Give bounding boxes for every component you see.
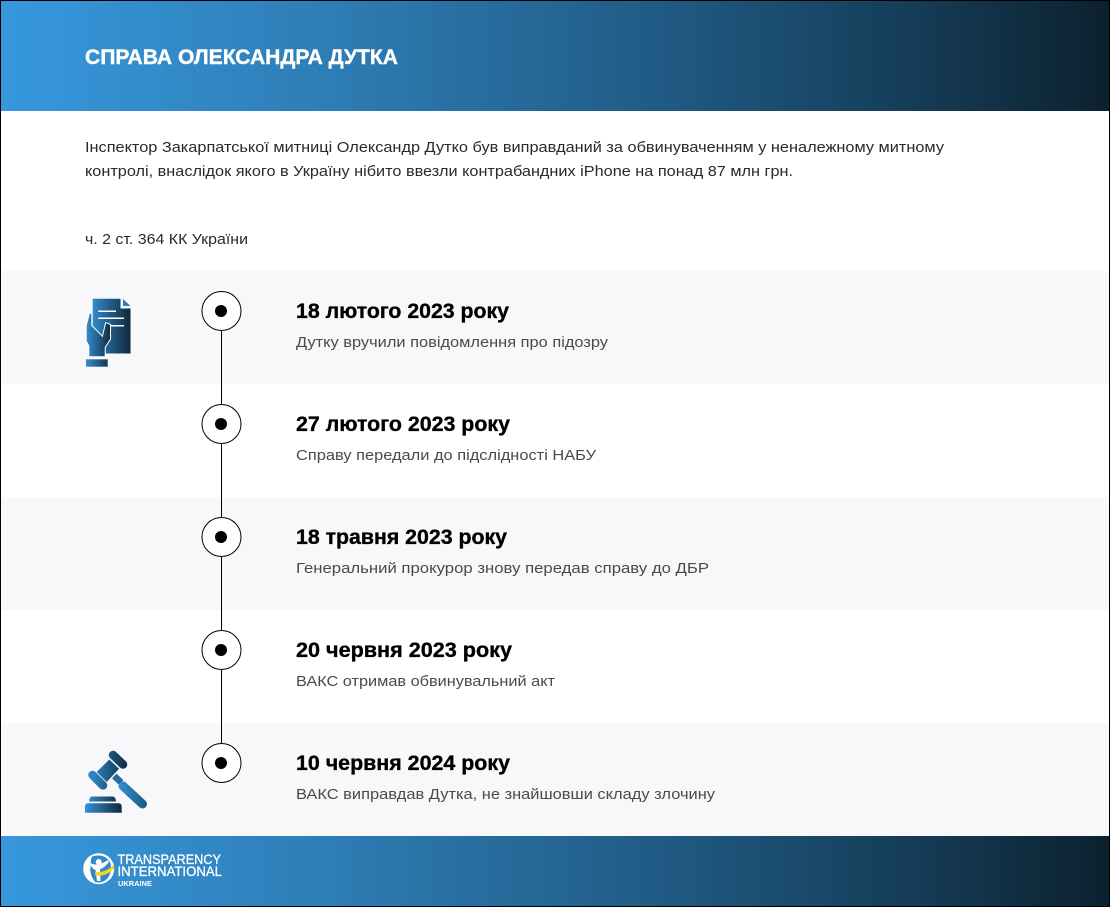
icon: judge gavel	[85, 755, 142, 813]
timeline event 5	[202, 744, 716, 803]
description 2: Справу передали до підслідності НАБУ	[296, 447, 596, 464]
date 2: 27 лютого 2023 року	[296, 413, 510, 436]
marker 1	[202, 292, 241, 330]
timeline event 3	[202, 518, 709, 577]
logo wordmark: TRANSPARENCY	[118, 852, 221, 867]
icon: hand holding document	[86, 299, 130, 367]
timeline event 1	[202, 292, 609, 351]
description 4: ВАКС отримав обвинувальний акт	[296, 673, 555, 690]
intro paragraph: контролі, внаслідок якого в Україну нібито ввезли контрабандних iPhone на понад 87 млн грн.	[85, 163, 793, 180]
marker 2	[202, 404, 241, 444]
title: СПРАВА ОЛЕКСАНДРА ДУТКА	[85, 46, 398, 69]
header band	[1, 1, 1109, 111]
footer band	[1, 836, 1109, 906]
timeline connector line	[220, 325, 222, 750]
intro paragraph: Інспектор Закарпатської митниці Олександр Дутко був виправданий за обвинуваченням у неналежному митному	[85, 139, 945, 156]
logo: Transparency International Ukraine	[83, 852, 222, 888]
date 1: 18 лютого 2023 року	[296, 300, 509, 323]
description 5: ВАКС виправдав Дутка, не знайшовши складу злочину	[296, 786, 716, 803]
date 3: 18 травня 2023 року	[296, 526, 507, 549]
logo: Transparency International Ukraine: INTERNATIONAL	[118, 864, 222, 879]
legal article reference: ч. 2 ст. 364 КК України	[85, 231, 248, 248]
date 4: 20 червня 2023 року	[296, 639, 512, 662]
timeline row backgrounds	[1, 271, 1109, 836]
marker 5	[202, 744, 241, 782]
description 3: Генеральний прокурор знову передав справу до ДБР	[296, 560, 709, 577]
marker 3	[202, 518, 241, 556]
description 1: Дутку вручили повідомлення про підозру	[296, 334, 609, 351]
timeline event 2	[202, 404, 596, 464]
logo: Transparency International Ukraine: UKRAINE	[118, 881, 152, 888]
logo emblem	[83, 853, 114, 884]
date 5: 10 червня 2024 року	[296, 752, 510, 775]
intro paragraph	[85, 139, 945, 180]
timeline event 4	[202, 630, 555, 690]
marker 4	[202, 630, 241, 670]
